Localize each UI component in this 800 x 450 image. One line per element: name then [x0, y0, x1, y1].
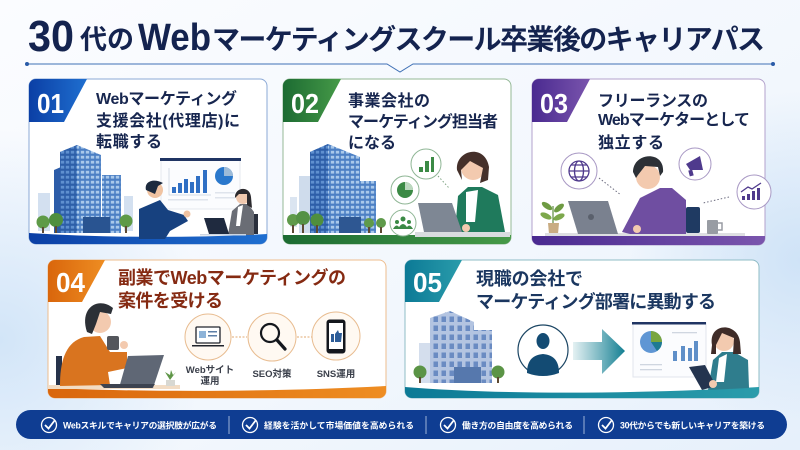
panel 03: freelance	[532, 79, 771, 245]
illustration: freelancer with laptop	[545, 156, 745, 236]
badge 02: 02	[291, 88, 319, 119]
benefit 4: 30代からでも新しいキャリアを築ける	[620, 420, 765, 430]
heading 01: 転職する	[96, 133, 162, 151]
bottom band	[405, 387, 759, 398]
title: Web	[138, 17, 211, 59]
dashed connectors	[232, 336, 312, 338]
label: SNS: SNS運用	[317, 369, 355, 380]
badge 04	[48, 260, 105, 302]
heading 04	[118, 267, 346, 311]
badge 05	[405, 260, 462, 302]
heading 02: になる	[348, 134, 396, 152]
heading 05	[476, 269, 716, 312]
label: website	[186, 365, 234, 387]
illustration: desk plant	[165, 370, 176, 386]
illustration: employee with laptop	[415, 152, 510, 237]
illustration: mug	[707, 220, 722, 234]
title divider with centre notch	[25, 62, 775, 72]
icon: pie circle	[391, 176, 419, 204]
bottom band	[283, 235, 511, 244]
badge 03: 03	[540, 88, 568, 119]
badge 03	[532, 79, 590, 122]
heading 03: 独立する	[598, 134, 664, 152]
badge 01	[29, 79, 87, 122]
panel 05: internal transfer	[405, 260, 759, 398]
illustration: plant	[539, 200, 566, 234]
heading 05: マーケティング部署に異動する	[476, 291, 716, 312]
heading 03: Webマーケターとして	[598, 111, 750, 129]
title: マーケティングスクール卒業後のキャリアパス	[212, 23, 765, 55]
icon: employee silhouette	[518, 325, 568, 376]
badge 05: 05	[413, 267, 442, 298]
heading 01	[96, 89, 240, 151]
benefit 2	[242, 418, 414, 432]
benefit 1	[42, 418, 217, 432]
illustration: office towers	[36, 145, 133, 233]
heading 03	[598, 93, 750, 152]
heading 04: 副業でWebマーケティングの	[118, 267, 346, 288]
illustration: consultant	[139, 181, 190, 239]
illustration: company building	[414, 311, 504, 383]
icon: smartphone like	[312, 312, 360, 360]
benefit 3: 働き方の自由度を高められる	[462, 420, 573, 430]
benefit 4	[598, 418, 765, 432]
heading 04: 案件を受ける	[118, 290, 223, 311]
icon: megaphone circle	[679, 148, 711, 180]
illustration: staff with tablet	[689, 327, 749, 390]
heading 02	[348, 91, 498, 152]
icon: people circle	[390, 210, 416, 236]
title: 代の	[80, 25, 134, 55]
illustration: office towers	[287, 144, 386, 233]
title: 30	[28, 12, 74, 61]
icon: magnifier	[248, 313, 296, 361]
badge 01: 01	[37, 88, 64, 119]
label: website: 運用	[200, 376, 220, 387]
bottom band	[48, 386, 386, 398]
label: SEO: SEO対策	[252, 368, 292, 380]
panel 01: agency	[29, 79, 267, 244]
heading 02: マーケティング担当者	[348, 112, 498, 131]
panel 02: in-house	[283, 79, 511, 244]
illustration: person with coffee and laptop	[48, 303, 180, 389]
heading 01: Webマーケティング	[96, 89, 237, 108]
bottom band	[29, 233, 267, 244]
bottom benefits bar	[16, 410, 787, 439]
label: website: Webサイト	[186, 365, 234, 376]
icon: globe circle	[561, 153, 621, 195]
heading 01: 支援会社(代理店)に	[96, 111, 240, 130]
illustration: report board	[632, 322, 706, 377]
illustration: presentation board	[160, 158, 241, 209]
benefit 2: 経験を活かして市場価値を高められる	[264, 420, 414, 430]
benefit 1: Webスキルでキャリアの選択肢が広がる	[63, 420, 217, 430]
badge 02	[283, 79, 341, 122]
icon: website	[185, 314, 231, 360]
bottom band	[532, 236, 765, 245]
badge 04: 04	[56, 267, 85, 298]
heading 03: フリーランスの	[598, 93, 708, 110]
heading 05: 現職の会社で	[476, 269, 583, 289]
benefit 3	[440, 418, 573, 432]
icon: bar chart circle	[411, 149, 449, 188]
panel 04: side job	[48, 260, 386, 398]
icon: chart circle	[703, 175, 771, 209]
arrow	[573, 329, 625, 374]
illustration: client with laptop	[200, 189, 258, 236]
title	[28, 12, 765, 61]
heading 02: 事業会社の	[348, 91, 430, 110]
